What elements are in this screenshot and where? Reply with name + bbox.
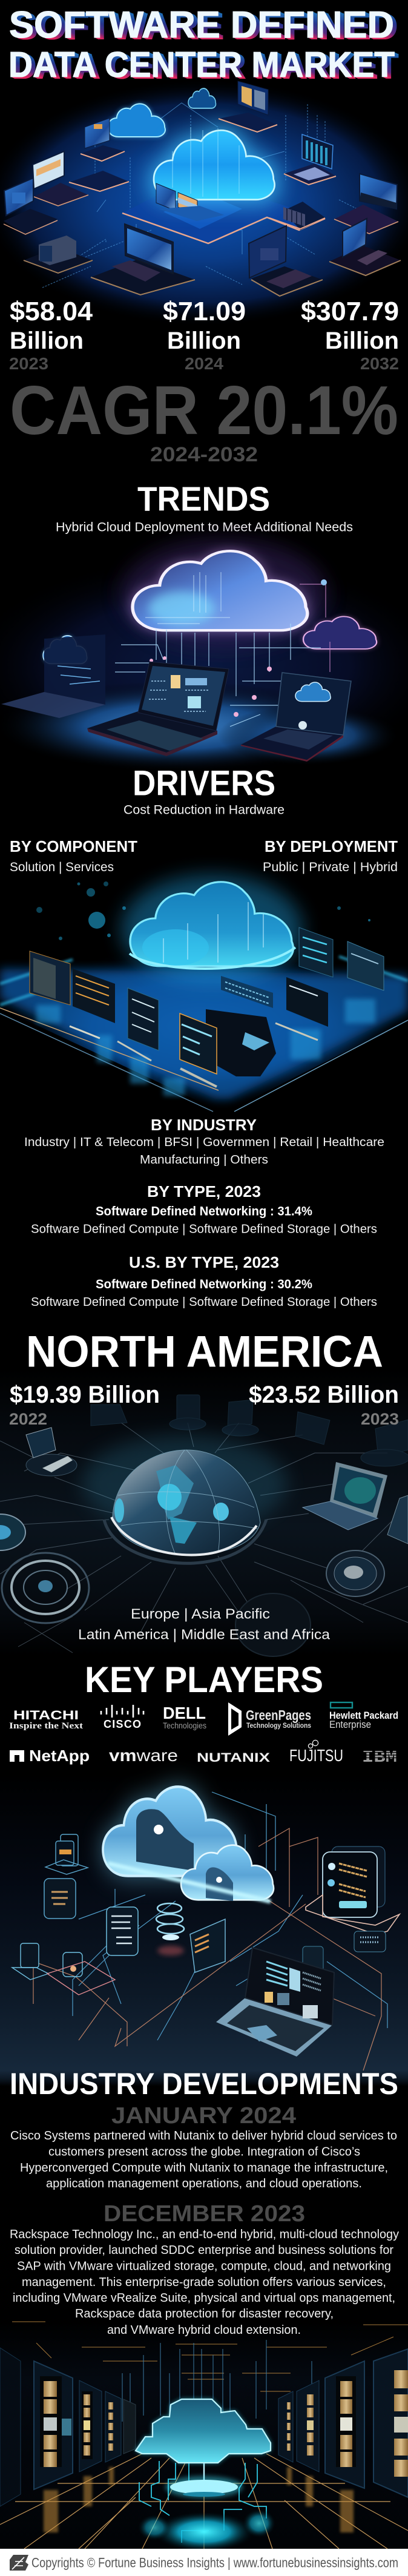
- segment: by component: BY COMPONENT: [10, 837, 137, 855]
- development: January 2024: Hyperconverged Compute with Nutanix to manage the infrastructure,: [20, 2161, 388, 2175]
- laptop: left middle: [81, 118, 125, 161]
- segment: by component: Solution | Services: [10, 860, 114, 874]
- segment: by industry: Manufacturing | Others: [140, 1153, 268, 1167]
- stat: 2024: Billion: [167, 328, 241, 354]
- laptop: center small screens: [156, 183, 224, 221]
- server rack: right 3: [278, 2391, 293, 2462]
- server rack: center left: [117, 988, 159, 1061]
- development: December 2023: management. This enterprise-grade solution offers various services,: [22, 2276, 386, 2289]
- illustration: data center hall: [0, 2322, 408, 2552]
- server rack: far right: [373, 2349, 408, 2497]
- floor glow: [137, 2509, 276, 2552]
- stat: north america 2022: $19.39 Billion: [10, 1382, 160, 1408]
- heading: trends: TRENDS: [137, 479, 270, 518]
- server rack: right 3: [275, 977, 328, 1040]
- cloud: right: [303, 616, 377, 649]
- server rack: far left: [0, 2348, 21, 2506]
- stat: 2024: 2024: [185, 354, 223, 373]
- floor lines: [0, 2454, 408, 2549]
- node: bottom center dim: [235, 1593, 311, 1656]
- server rack: right 1: [299, 927, 333, 977]
- globe dome: [82, 1435, 288, 1563]
- server rack: left 4: [123, 2399, 136, 2454]
- laptop: far left: [4, 178, 58, 234]
- laptop: right middle: [284, 134, 336, 185]
- platform: central: [122, 183, 325, 243]
- cloud: front: [181, 1845, 274, 1901]
- text: other regions: [78, 1606, 330, 1642]
- footer: [0, 2549, 408, 2576]
- logo: VMware: vmware: [109, 1746, 178, 1765]
- logo: Fujitsu: [289, 1740, 343, 1765]
- segment: by type 2023: Software Defined Compute | Software Defined Storage | Others: [31, 1223, 377, 1236]
- segment: by deployment: [263, 837, 398, 874]
- logo: NetApp: NetApp: [29, 1747, 90, 1765]
- segment: U.S. by type 2023: [31, 1253, 377, 1309]
- stat: north america 2023: 2023: [361, 1410, 399, 1428]
- circuit lines: [42, 103, 363, 288]
- laptop: left: [33, 151, 88, 206]
- logo: GreenPages: [228, 1702, 311, 1736]
- segment: by industry: Industry | IT & Telecom | BFSI | Governmen | Retail | Healthcare: [24, 1136, 384, 1149]
- server rack: right 2: [297, 2380, 319, 2472]
- text: other regions: Europe | Asia Pacific: [131, 1606, 270, 1621]
- logo: Nutanix: NUTANIX: [197, 1751, 270, 1765]
- card: bottom left: [12, 1943, 115, 1995]
- logo: Hitachi: Inspire the Next: [9, 1721, 83, 1731]
- node: bottom left: [2, 1553, 89, 1623]
- development: December 2023: DECEMBER 2023: [104, 2201, 305, 2227]
- server rack: left 2: [70, 969, 115, 1038]
- segment: by type 2023: BY TYPE, 2023: [147, 1182, 261, 1201]
- card: left middle: [44, 1879, 76, 1919]
- cloud: left: [43, 636, 87, 664]
- heading: key players: KEY PLAYERS: [85, 1659, 323, 1700]
- device: laptop upper left: [26, 1428, 77, 1476]
- laptop: bottom center left: [91, 224, 195, 295]
- logo: Dell: DELL: [163, 1704, 206, 1722]
- heading: north america: NORTH AMERICA: [26, 1327, 383, 1377]
- logo: Hewlett Packard Enterprise: [329, 1702, 398, 1730]
- stat: 2032: Billion: [325, 328, 399, 354]
- stat: north america 2023: [249, 1382, 399, 1428]
- glowing cloud: center: [149, 126, 279, 203]
- logo: Dell: Technologies: [163, 1721, 206, 1730]
- laptop: bottom: [216, 1948, 334, 2057]
- heading: drivers: DRIVERS: [133, 764, 275, 803]
- stat: 2032: 2032: [360, 354, 399, 373]
- stat: north america 2022: 2022: [9, 1410, 47, 1428]
- laptop: right: [334, 174, 398, 234]
- segment: by deployment: Public | Private | Hybrid: [263, 860, 398, 874]
- card: large right: [306, 1846, 400, 1934]
- device: edge right: [387, 1495, 408, 1544]
- glowing cloud: [136, 2399, 271, 2463]
- development: December 2023: [10, 2201, 399, 2337]
- card: small right: [303, 1931, 386, 1972]
- segment: by industry: BY INDUSTRY: [151, 1116, 257, 1134]
- development: January 2024: [10, 2103, 397, 2190]
- development: December 2023: including VMware vRealize Suite, physical and virtual ops management,: [13, 2291, 395, 2305]
- server rack: center: [180, 976, 276, 1087]
- card: center left: [107, 1907, 138, 1955]
- laptop: top center: [219, 81, 277, 132]
- laptop: center: [87, 662, 229, 756]
- device: dim top row: [91, 1395, 408, 1466]
- logo: Hewlett Packard Enterprise: Enterprise: [329, 1719, 371, 1730]
- server rack: left: [34, 2361, 73, 2489]
- text: drivers detail: Cost Reduction in Hardware: [123, 803, 285, 817]
- ceiling lines: [12, 2322, 408, 2391]
- card: top left: [45, 1834, 88, 1874]
- logo: Hitachi: HITACHI: [13, 1708, 79, 1722]
- development: January 2024: JANUARY 2024: [111, 2103, 296, 2129]
- development: December 2023: SAP with VMware virtualized storage, compute, cloud, and networking: [17, 2259, 391, 2273]
- development: December 2023: Rackspace data protection for disaster recovery,: [75, 2307, 334, 2321]
- illustration: cloud over server platform: [0, 875, 408, 1112]
- platform floor: [0, 944, 408, 1112]
- bokeh particles: [36, 881, 370, 964]
- segment: by deployment: BY DEPLOYMENT: [265, 837, 398, 855]
- laptop: right: [241, 673, 351, 762]
- laptop: bottom right: [329, 219, 401, 275]
- cloud: large: [103, 1787, 238, 1876]
- device: laptop right: [303, 1462, 387, 1530]
- servers: right: [269, 202, 326, 230]
- stat: 2032: $307.79: [301, 297, 399, 326]
- development: December 2023: solution provider, launched SDDC enterprise and business solutions for: [15, 2244, 393, 2257]
- stat: 2023: Billion: [10, 328, 84, 354]
- stat: 2024: [163, 297, 246, 373]
- title: SOFTWARE DEFINED: [9, 4, 394, 46]
- database stack: [156, 1903, 184, 1955]
- illustration: cloud security network: [0, 1774, 408, 2086]
- cloud: large: [133, 551, 308, 630]
- icon: Fortune Business Insights logo: [10, 2555, 28, 2571]
- server rack: right 2: [347, 941, 384, 990]
- circuit lines: [33, 1792, 387, 2070]
- segment: U.S. by type 2023: U.S. BY TYPE, 2023: [129, 1253, 279, 1271]
- segment: by industry: [24, 1116, 384, 1167]
- logo: Hewlett Packard Enterprise: Hewlett Packard: [329, 1710, 398, 1721]
- stat: 2023: $58.04: [10, 297, 93, 326]
- servers: bottom left: [24, 236, 93, 273]
- development: December 2023: and VMware hybrid cloud extension.: [107, 2324, 301, 2337]
- text: trends detail: Hybrid Cloud Deployment to Meet Additional Needs: [56, 521, 353, 534]
- node: bottom right: [326, 1550, 384, 1596]
- server rack: left 2: [79, 2380, 102, 2472]
- light reflections: [36, 999, 375, 1096]
- logo: Hitachi: [9, 1708, 83, 1731]
- platform: small left: [69, 171, 129, 191]
- logo: Fujitsu: FUJITSU: [289, 1746, 343, 1765]
- logo: GreenPages: GreenPages: [246, 1707, 311, 1723]
- illustration: globe network: [0, 1369, 408, 1656]
- logo: Cisco: [101, 1705, 143, 1730]
- connection lines: [115, 584, 330, 726]
- logo: GreenPages: Technology Solutions: [246, 1721, 311, 1730]
- illustration: cloud network with laptops: [0, 79, 408, 327]
- CAGR period: 2024-2032: [150, 443, 258, 466]
- stat: 2023: 2023: [9, 354, 48, 373]
- floor reflections: [44, 2467, 354, 2532]
- laptop: left dim: [1, 634, 105, 718]
- text: other regions: Latin America | Middle East and Africa: [78, 1626, 330, 1642]
- development: January 2024: application management operations, and cloud operations.: [46, 2177, 362, 2190]
- laptop: bottom center right: [249, 226, 323, 296]
- glowing pad: [165, 2476, 243, 2498]
- title: [8, 4, 395, 85]
- cloud: [121, 875, 303, 984]
- stat: north america 2023: $23.52 Billion: [249, 1382, 399, 1408]
- segment: by type 2023: Software Defined Networking : 31.4%: [96, 1205, 312, 1218]
- server rack: left 1: [30, 951, 70, 1005]
- node: left edge: [0, 1514, 25, 1550]
- illustration: hybrid cloud with laptops: [0, 539, 408, 778]
- logo: Cisco: CISCO: [104, 1718, 141, 1730]
- development: December 2023: Rackspace Technology Inc., an end-to-end hybrid, multi-cloud technology: [10, 2228, 399, 2241]
- logo: Dell: [163, 1704, 206, 1730]
- server rack: right: [325, 2361, 364, 2488]
- glowing cloud: top: [188, 88, 216, 108]
- stat: north america 2022: [9, 1382, 160, 1428]
- card: center right: [190, 1919, 225, 1972]
- development: January 2024: customers present across the globe. Integration of Cisco’s: [48, 2146, 360, 2159]
- segment: by component: [10, 837, 137, 874]
- glowing shelf: [108, 1863, 271, 1902]
- stat: 2023: [9, 297, 93, 373]
- stat: 2032: [301, 297, 399, 373]
- segment: by type 2023: [31, 1182, 377, 1236]
- stat: 2024: $71.09: [163, 297, 246, 326]
- development: January 2024: Cisco Systems partnered with Nutanix to deliver hybrid cloud services to: [10, 2129, 397, 2143]
- glowing cloud: left: [108, 104, 165, 137]
- server rack: left 3: [105, 2391, 121, 2462]
- network lines: [0, 1423, 408, 1653]
- circuit traces: [139, 2461, 266, 2543]
- segment: U.S. by type 2023: Software Defined Networking : 30.2%: [96, 1277, 312, 1291]
- logo: IBM: IBM: [362, 1749, 397, 1767]
- segment: U.S. by type 2023: Software Defined Compute | Software Defined Storage | Others: [31, 1296, 377, 1309]
- data nodes: [150, 579, 327, 717]
